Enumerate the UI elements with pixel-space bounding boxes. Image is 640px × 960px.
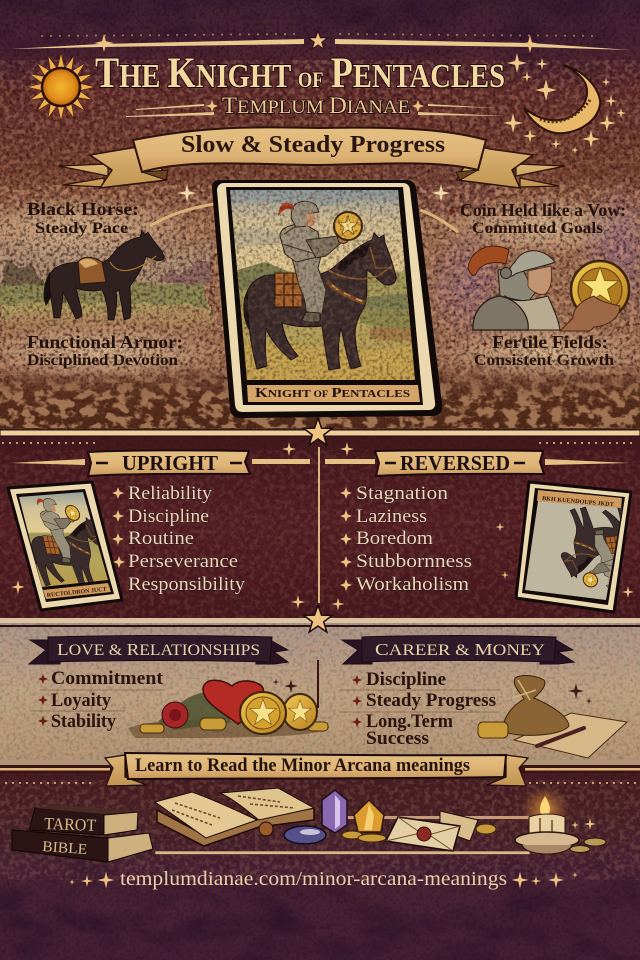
icon: sealed envelope xyxy=(386,811,496,851)
banner: learn to read: Learn to Read the Minor Arcana meanings xyxy=(135,755,470,776)
card: reversed small xyxy=(516,482,640,612)
small sparkles in middle section xyxy=(11,522,634,610)
leader curves to card xyxy=(150,204,458,232)
banner: upright: UPRIGHT xyxy=(122,451,218,475)
banner: slow & steady progress: Slow & Steady Progress xyxy=(181,132,445,158)
text: fertile fields label: Fertile Fields: xyxy=(492,332,608,352)
text: black horse label: Black Horse: xyxy=(27,199,139,219)
banner: slow & steady progress xyxy=(59,127,565,188)
icon: tarot and bible books: BIBLE xyxy=(42,839,88,858)
icon: lit candle xyxy=(515,786,606,854)
icon: crescent moon and stars xyxy=(503,53,626,154)
card: reversed small: BKH KUENDOUPS JKDT xyxy=(542,496,614,508)
list: love keywords: Commitment xyxy=(51,668,164,689)
icon: tarot and bible books xyxy=(12,805,153,862)
right scene: knight bust holding coin xyxy=(468,246,629,331)
text: functional armor label: Functional Armor: xyxy=(27,332,183,352)
icon: tarot and bible books: TAROT xyxy=(44,814,97,835)
icon: black horse xyxy=(44,231,164,320)
text: coin held like a vow label: Coin Held like a Vow: xyxy=(460,200,626,220)
banner: reversed xyxy=(325,450,630,476)
list: reversed keywords: Boredom xyxy=(356,528,433,549)
list: reversed keywords: Laziness xyxy=(356,506,427,527)
banner: career and money xyxy=(342,636,574,664)
illustration: coin bag and scroll xyxy=(478,676,627,758)
list: love keywords xyxy=(30,668,165,732)
icon: sun xyxy=(27,53,95,121)
text: coin held like a vow label xyxy=(448,200,626,237)
list: upright keywords: Perseverance xyxy=(128,551,238,572)
banner: reversed: REVERSED xyxy=(400,451,510,475)
text: fertile fields label xyxy=(474,332,614,369)
list: career keywords: Discipline xyxy=(366,669,446,690)
list: career keywords: Steady Progress xyxy=(366,690,496,711)
illustration: heart, rose and coins xyxy=(128,678,330,738)
list: upright keywords: Reliability xyxy=(128,483,213,504)
text: fertile fields label: Consistent Growth xyxy=(474,352,614,369)
text: coin held like a vow label: Committed Goals xyxy=(472,220,603,237)
header top rule xyxy=(10,31,630,53)
banner: love and relationships xyxy=(29,636,288,664)
sparkles beside card xyxy=(178,184,450,202)
list: love keywords: Stability xyxy=(51,711,116,732)
list: love keywords: Loyaity xyxy=(51,690,111,711)
banner: career and money: CAREER & MONEY xyxy=(375,640,545,659)
card: upright small: RUCTOLDRON JUCT xyxy=(47,587,107,599)
list: upright keywords xyxy=(112,483,246,595)
list: reversed keywords xyxy=(340,483,472,595)
list: career keywords: Long.Term xyxy=(366,711,453,732)
left landscape scene with black horse xyxy=(0,231,215,342)
subtitle with rules: TEMPLUM DIANAE xyxy=(222,93,410,118)
list: career keywords: Success xyxy=(366,728,429,749)
banner: love and relationships: LOVE & RELATIONSHIPS xyxy=(57,640,260,659)
central tarot card: KNIGHT OF PENTACLES xyxy=(255,386,410,401)
illustration: knight on black horse xyxy=(243,201,396,370)
divider with star xyxy=(0,418,640,456)
list: reversed keywords: Stubbornness xyxy=(356,551,472,572)
text: black horse label: Steady Pace xyxy=(35,220,128,237)
subtitle with rules xyxy=(126,93,506,118)
list: upright keywords: Routine xyxy=(128,528,194,549)
card: upright small xyxy=(8,482,122,610)
icon: crystals and stone xyxy=(284,790,386,844)
title: THE KNIGHT OF PENTACLES xyxy=(95,50,505,97)
icon: open book xyxy=(155,788,314,846)
divider with star xyxy=(0,605,640,632)
text: functional armor label xyxy=(27,332,183,369)
central tarot card xyxy=(212,180,442,418)
list: reversed keywords: Stagnation xyxy=(356,483,449,504)
banner: learn to read xyxy=(0,753,640,786)
list: career keywords xyxy=(340,669,500,749)
vertical divider lower xyxy=(317,660,319,708)
text: black horse label xyxy=(27,199,139,237)
list: upright keywords: Responsibility xyxy=(128,574,246,595)
text: functional armor label: Disciplined Devotion xyxy=(27,352,178,369)
divider line between upright and reversed xyxy=(318,447,320,603)
footer url with stars: templumdianae.com/minor-arcana-meanings xyxy=(120,868,507,890)
illustration: shelf lines xyxy=(155,816,530,854)
list: reversed keywords: Workaholism xyxy=(356,574,469,595)
list: upright keywords: Discipline xyxy=(128,506,209,527)
banner: upright xyxy=(10,450,310,476)
